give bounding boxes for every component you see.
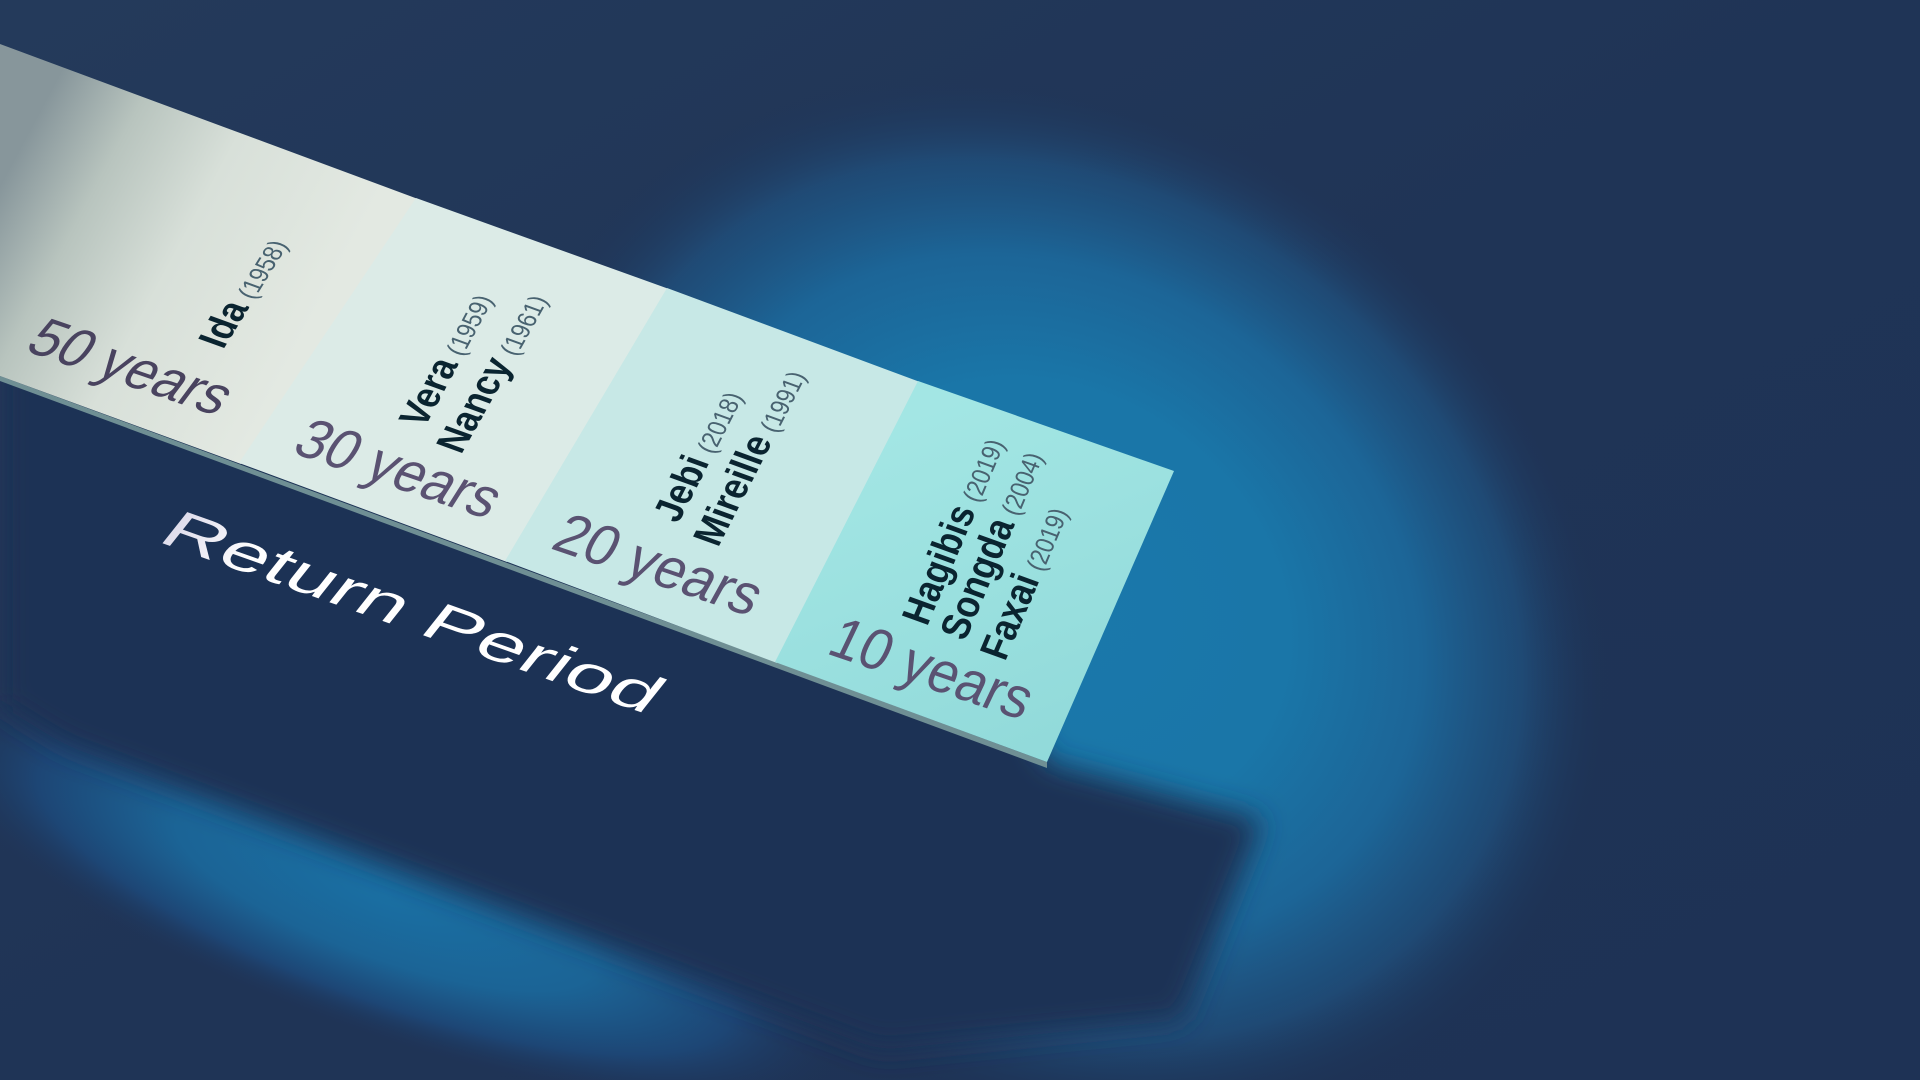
axis title: Return Period: Return Period [148,501,678,724]
segment: 50 years [0,44,418,464]
strip bottom bevel [0,376,1047,768]
typhoon: Nancy: Nancy(1961) [427,287,556,458]
typhoon: Mireille: Mireille(1991) [684,363,814,551]
typhoon: Jebi: Jebi(2018) [644,384,751,527]
segment: 20 years [505,288,920,663]
label: 50 years: 50 years [15,308,247,427]
typhoon: Faxai: Faxai(2019) [971,500,1077,665]
typhoon: Songda: Songda(2004) [931,444,1052,645]
return period strip [0,44,1174,768]
label: 20 years: 20 years [542,502,775,628]
strip shadow [0,300,1262,1050]
label: 30 years: 30 years [283,408,515,531]
segment: 10 years [775,381,1174,762]
typhoon: Ida: Ida(1958) [189,232,296,353]
label: 10 years: 10 years [819,606,1044,732]
typhoon: Hagibis: Hagibis(2019) [893,431,1013,630]
typhoon: Vera: Vera(1959) [390,287,501,432]
segment: 30 years [239,198,669,562]
